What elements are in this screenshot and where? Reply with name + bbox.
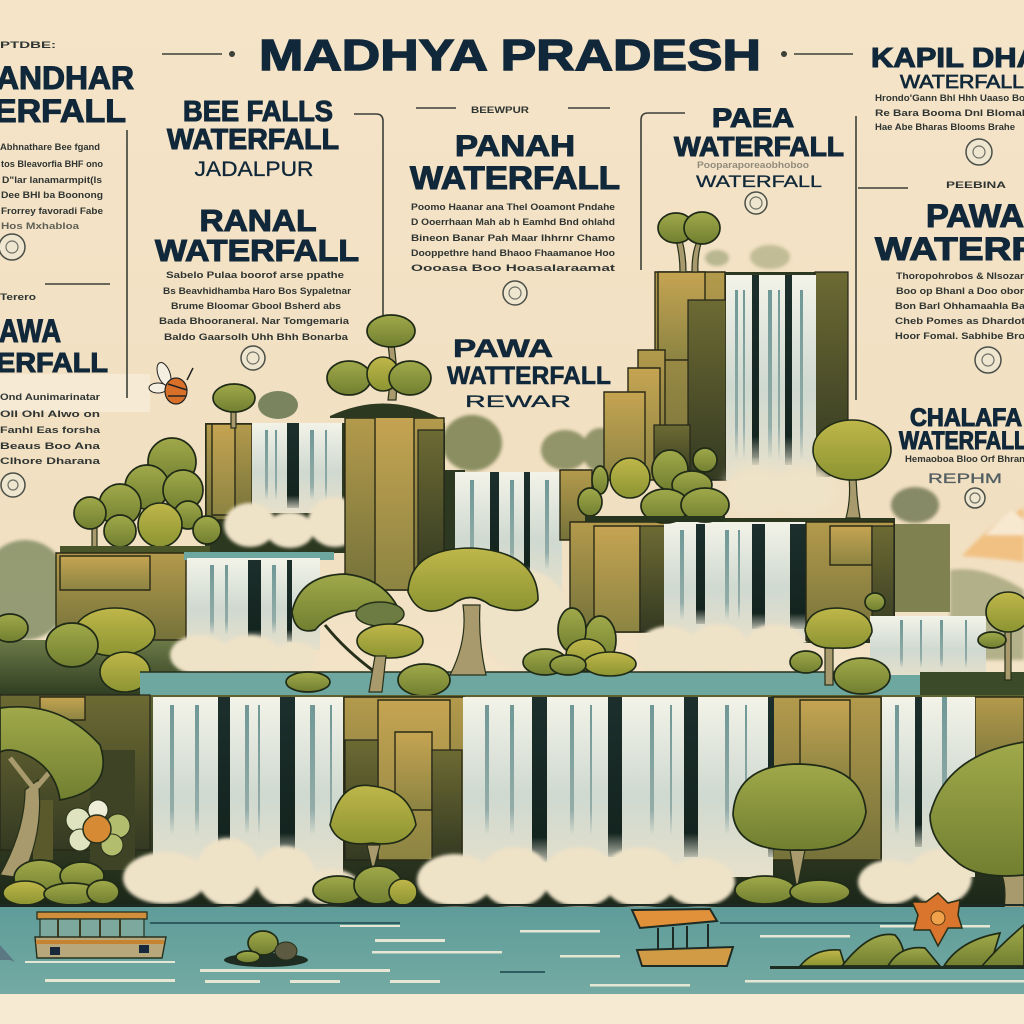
boat: ferry left — [35, 912, 166, 958]
panel: Pawa waterfall right: Bon Barl Ohhamaahla Ba — [895, 301, 1024, 311]
panel: Pawa waterfall (left crop): Terero — [0, 292, 37, 302]
panel: Pawa waterfall (left crop): Beaus Boo Ana — [0, 441, 101, 451]
bushes on ledge — [578, 448, 729, 523]
panel: Panah waterfall — [410, 105, 620, 305]
panel: Jandhar waterfall (cropped left): PTDBE: — [0, 40, 56, 50]
panel: Bee Falls waterfall: WATERFALL — [167, 124, 339, 156]
panel: Jandhar waterfall (cropped left): Dee BHI ba Boonong — [1, 190, 103, 200]
waterfall: far right small — [870, 616, 986, 678]
cliff: left rocks — [0, 695, 150, 870]
panel: Pawa waterfall (left crop) — [0, 284, 150, 497]
panel: Pawa waterfall right: PEEBINA — [946, 180, 1007, 190]
bush: bottom left rocks — [3, 860, 119, 905]
panel: Ranal waterfall: Baldo Gaarsolh Uhh Bhh Bonarba — [164, 332, 349, 342]
tree: bottom mid — [313, 785, 417, 905]
tree: large left — [0, 707, 103, 878]
icon: orange cloud — [962, 508, 1024, 562]
tree: large right — [930, 742, 1024, 930]
panel: Pawa waterfall right: Hoor Fomal. Sabhibe Bro — [895, 331, 1024, 341]
panel: Kapil Dhara waterfall: KAPIL DHA — [871, 42, 1024, 73]
waterfall group: center — [445, 470, 592, 670]
panel: Jandhar waterfall (cropped left): Hos Mxhabloa — [1, 221, 80, 231]
panel: Pawa waterfall (left crop): Ond Aunimarinatar — [0, 392, 101, 402]
tree on tower — [658, 212, 720, 272]
panel: Bee Falls waterfall — [167, 96, 383, 340]
tree: small — [213, 384, 298, 428]
panel: Kapil Dhara waterfall: Hae Abe Bharas Blooms Brahe — [875, 122, 1015, 132]
river: middle terrace — [140, 672, 1024, 696]
boat: orange right — [632, 909, 733, 966]
cliff: left of fall — [206, 424, 252, 520]
waterfall group: mid right — [570, 420, 950, 678]
panel: Panah waterfall: WATERFALL — [410, 160, 620, 196]
panel: Ranal waterfall: WATERFALL — [155, 233, 359, 268]
cliff: right rocks — [772, 697, 1024, 860]
waterfall: bottom left — [153, 697, 343, 877]
panel: Chalafa waterfall: Hemaoboa Bloo Orf Bhran — [905, 454, 1024, 464]
panel: Kapil Dhara waterfall: Hrondo'Gann Bhl Hhh Uaaso Bo — [875, 93, 1024, 103]
panel: Ranal waterfall: Sabelo Pulaa boorof arse ppathe — [166, 270, 344, 280]
waterfall: upper left lower fall — [170, 558, 320, 675]
panel: Jandhar waterfall (cropped left): ANDHAR — [0, 60, 134, 96]
panel: Ranal waterfall: RANAL — [200, 203, 316, 238]
water highlights — [25, 922, 1024, 986]
tree: right bush — [790, 593, 890, 694]
bottom cliff — [0, 695, 1024, 907]
river — [0, 905, 1024, 995]
rock island — [224, 931, 308, 967]
panel: Panah waterfall: BEEWPUR — [471, 105, 530, 115]
icon: orange flower — [912, 893, 962, 946]
panel: Jandhar waterfall (cropped left): Frorrey favoradi Fabe — [1, 206, 103, 216]
panel: Bee Falls waterfall: JADALPUR — [194, 158, 314, 181]
cliff: right — [806, 522, 894, 640]
panel: Pawa waterfall right: Cheb Pomes as Dhardot — [895, 316, 1024, 326]
tree: umbrella centre — [408, 548, 538, 675]
panel: Chalafa waterfall: REPHM — [928, 470, 1002, 486]
tree: far right small — [978, 592, 1024, 680]
panel: Pawa waterfall Rewar: REWAR — [465, 392, 571, 411]
waterfall: center fall — [455, 472, 562, 597]
panel: Ranal waterfall — [155, 203, 359, 370]
tree: bottom right round — [733, 764, 866, 904]
icon: bee — [149, 361, 193, 404]
panel: Palea waterfall: WATERFALL — [674, 131, 844, 162]
bush: centre right — [523, 608, 636, 676]
panel: Jandhar waterfall (cropped left): Abhnathare Bee fgand — [0, 142, 100, 152]
foam — [636, 624, 807, 678]
panel: Panah waterfall: PANAH — [455, 130, 575, 163]
foam: bottom — [123, 838, 972, 907]
panel: Jandhar waterfall (cropped left): D"lar lanamarmpit(ls — [2, 175, 102, 185]
panel: Pawa waterfall (left crop): Oll Ohl Alwo on — [0, 409, 100, 419]
panel: Pawa waterfall (left crop): Fanhl Eas forsha — [0, 425, 101, 435]
panel: Panah waterfall: Dooppethre hand Bhaoo Fhaamanoe Hoo — [411, 248, 616, 258]
foam — [725, 464, 838, 520]
cliff: centre rocks — [344, 697, 464, 860]
panel: Kapil Dhara waterfall — [856, 42, 1024, 400]
panel: Palea waterfall: PAEA — [712, 103, 794, 133]
panel: Ranal waterfall: Bada Bhooraneral. Nar Tomgemaria — [159, 316, 350, 326]
tree on ledge — [327, 315, 440, 418]
distant hazy trees and hills — [0, 245, 1024, 660]
left rock ledge — [0, 553, 190, 698]
title — [162, 31, 853, 80]
boat: left edge — [0, 945, 15, 962]
panel: Pawa waterfall right: WATERF — [875, 231, 1024, 267]
river bank — [0, 994, 1024, 1024]
panel: Palea waterfall: WATERFALL — [696, 172, 822, 191]
cliff: left — [570, 522, 668, 632]
panel: Pawa waterfall right: Boo op Bhanl a Doo obor — [896, 286, 1024, 296]
waterfall: fall — [664, 522, 806, 642]
panel: Pawa waterfall Rewar: PAWA — [453, 335, 553, 363]
panel: Ranal waterfall: Bs Beavhidhamba Haro Bos Sypaletnar — [163, 286, 352, 296]
panel: Ranal waterfall: Brume Bloomar Gbool Bsherd abs — [171, 301, 341, 311]
panel: Pawa waterfall (left crop): Clhore Dharana — [0, 456, 101, 466]
panel: Pawa waterfall right: PAWA — [926, 198, 1024, 234]
panel: Pawa waterfall right — [858, 180, 1024, 373]
panel: Kapil Dhara waterfall: Re Bara Booma Dnl Blomal — [875, 108, 1024, 118]
panel: Panah waterfall: Bineon Banar Pah Maar Ihhrnr Chamo — [411, 233, 616, 243]
panel: Bee Falls waterfall: BEE FALLS — [183, 96, 333, 128]
foam — [224, 497, 362, 548]
panel: Pawa waterfall Rewar — [447, 335, 611, 411]
waterfall group: tall top right — [604, 212, 848, 520]
panel: Palea waterfall: Pooparaporeaobhoboo — [697, 160, 810, 170]
pool: upper left — [184, 552, 334, 560]
tree: umbrella left — [286, 574, 450, 696]
right bank bushes — [770, 925, 1024, 969]
cliff: right of fall — [345, 416, 444, 590]
panel: Panah waterfall: Oooasa Boo Hoasalaraamat — [411, 263, 615, 273]
panel: Palea waterfall — [641, 103, 844, 270]
panel: Jandhar waterfall (cropped left) — [0, 40, 134, 364]
waterfall: fall — [252, 423, 342, 513]
panel: Panah waterfall: D Ooerrhaan Mah ab h Eamhd Bnd ohlahd — [411, 217, 615, 227]
panel: Pawa waterfall (left crop): AWA — [0, 313, 61, 349]
icon: flower — [66, 800, 130, 856]
panel: Pawa waterfall Rewar: WATTERFALL — [447, 362, 611, 390]
panel: Jandhar waterfall (cropped left): tos Bleavorfia BHF ono — [1, 159, 104, 169]
panel: Chalafa waterfall — [899, 404, 1024, 508]
waterfall: top fall — [726, 275, 816, 480]
bush: left upper — [60, 438, 221, 555]
waterfall group: upper left — [205, 315, 445, 590]
waterfall: bottom centre — [463, 697, 774, 877]
title: MADHYA PRADESH — [259, 31, 761, 80]
tree: round — [813, 420, 891, 518]
panel: Kapil Dhara waterfall: WATERFALL — [900, 72, 1024, 92]
cliff: left tower — [604, 272, 726, 480]
waterfall: bottom right — [882, 697, 975, 877]
panel: Pawa waterfall right: Thoropohrobos & Nlsozar — [896, 271, 1024, 281]
panel: Panah waterfall: Poomo Haanar ana Thel Ooamont Pndahe — [411, 202, 615, 212]
